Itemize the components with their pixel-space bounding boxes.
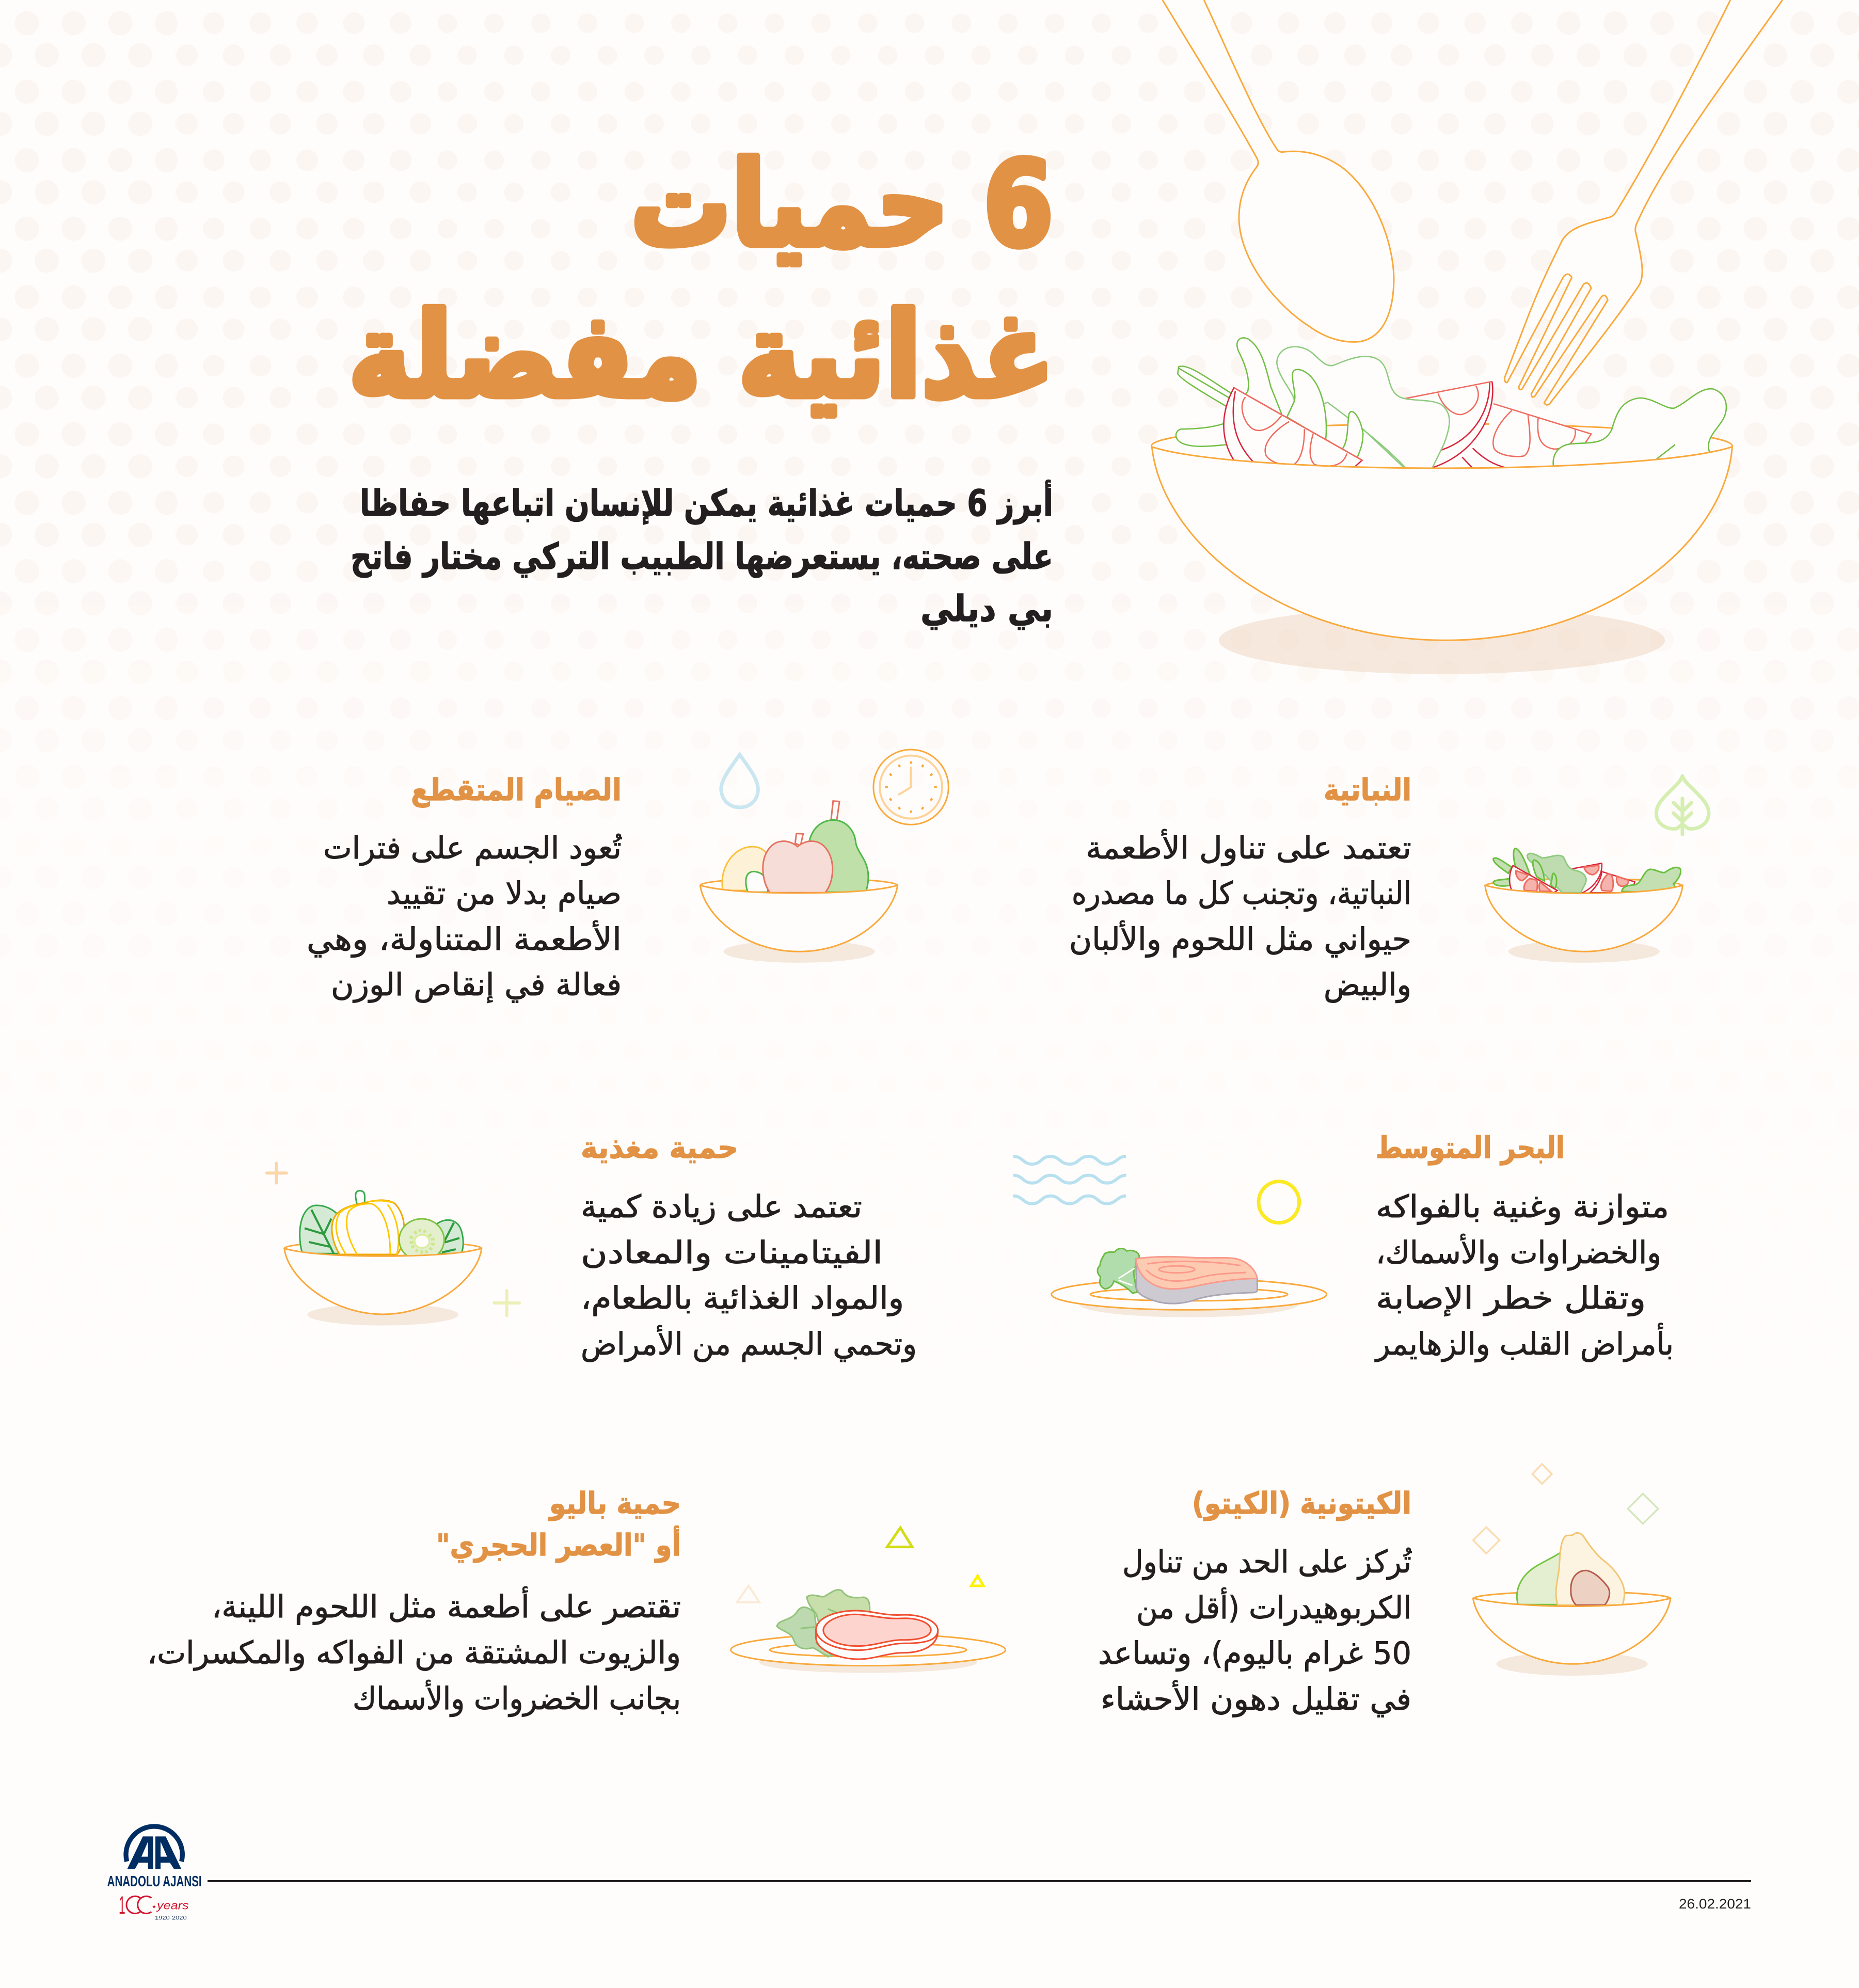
body: mediterranean: وتقلل خطر الإصابة <box>1376 1280 1646 1316</box>
bowl rim back <box>1151 424 1732 468</box>
body: keto: في تقليل دهون الأحشاء <box>1101 1680 1411 1717</box>
body: nutritious: الفيتامينات والمعادن <box>581 1235 883 1271</box>
panel: nutritious diet <box>267 1130 917 1362</box>
heading: mediterranean: البحر المتوسط <box>1376 1130 1565 1166</box>
body: intermittent fasting <box>307 830 622 1003</box>
body: intermittent fasting: الأطعمة المتناولة، وهي <box>307 920 622 958</box>
heading: paleo: أو "العصر الحجري" <box>436 1525 681 1563</box>
icon: plus signs <box>267 1163 287 1183</box>
icon: waves <box>1013 1156 1126 1204</box>
body: intermittent fasting: صيام بدلا من تقييد <box>387 876 622 912</box>
body: nutritious: وتحمي الجسم من الأمراض <box>581 1325 917 1362</box>
body: vegan <box>1069 829 1411 1003</box>
body: paleo: والزيوت المشتقة من الفواكه والمكسرات، <box>147 1635 681 1671</box>
heading: paleo <box>436 1486 681 1563</box>
icon: water drop <box>721 755 758 807</box>
salad leaves <box>1176 338 1726 468</box>
logo 100 years: 1 <box>119 1891 125 1919</box>
icon: leaf <box>1656 776 1709 835</box>
body: intermittent fasting: فعالة في إنقاص الوزن <box>331 967 622 1003</box>
body: keto: 50 غرام باليوم)، وتساعد <box>1098 1635 1411 1672</box>
heading: keto: الكيتونية (الكيتو) <box>1192 1486 1411 1521</box>
icon: diamonds <box>1532 1464 1552 1484</box>
logo 100 years: years <box>156 1899 189 1912</box>
body: nutritious <box>581 1189 917 1362</box>
title <box>348 137 1055 424</box>
body: vegan: تعتمد على تناول الأطعمة <box>1086 829 1411 866</box>
logo wordmark: ANADOLU AJANSI <box>107 1873 202 1890</box>
heading: nutritious: حمية مغذية <box>581 1130 738 1165</box>
icon: avocado bowl <box>1473 1464 1671 1676</box>
spoon <box>1163 0 1394 342</box>
logo 100 years: 1920-2020 <box>155 1915 187 1921</box>
body: paleo <box>147 1586 681 1717</box>
bowl shadow <box>1219 607 1665 674</box>
footer rule <box>208 1880 1751 1882</box>
title: غذائية مفضلة <box>348 288 1055 424</box>
body: vegan: حيواني مثل اللحوم والألبان <box>1069 920 1411 958</box>
intro text: على صحته، يستعرضها الطبيب التركي مختار فاتح <box>351 535 1053 578</box>
logo arc <box>126 1826 182 1862</box>
body: paleo: تقتصر على أطعمة مثل اللحوم اللينة، <box>212 1586 681 1625</box>
body: mediterranean: والخضراوات والأسماك، <box>1376 1234 1661 1271</box>
panel: intermittent fasting <box>307 750 948 1003</box>
intro text: بي ديلي <box>920 587 1053 630</box>
intro text: أبرز 6 حميات غذائية يمكن للإنسان اتباعها حفاظا <box>360 480 1053 525</box>
body: nutritious: تعتمد على زيادة كمية <box>581 1189 862 1225</box>
panel: vegan diet <box>1069 772 1709 1003</box>
intro text <box>351 480 1053 630</box>
logo 100 years <box>119 1891 189 1921</box>
icon: meat plate with triangles <box>731 1528 1006 1673</box>
panel: ketogenic diet <box>1098 1464 1671 1717</box>
fork <box>1504 0 1783 405</box>
body: keto: تُركز على الحد من تناول <box>1122 1544 1412 1580</box>
heading: paleo: حمية باليو <box>548 1486 681 1521</box>
icon: salad bowl with leaf <box>1485 776 1709 963</box>
body: mediterranean: بأمراض القلب والزهايمر <box>1374 1323 1674 1362</box>
logo letters AA <box>128 1836 181 1869</box>
logo 100 years: ★ <box>152 1904 156 1910</box>
icon: sun ring <box>1259 1182 1299 1223</box>
heading: intermittent fasting: الصيام المتقطع <box>411 772 622 808</box>
illustration: spoon fork and salad bowl <box>1151 0 1783 674</box>
logo: Anadolu Ajansi <box>107 1826 202 1921</box>
heading: vegan: النباتية <box>1324 772 1411 807</box>
body: paleo: بجانب الخضروات والأسماك <box>353 1680 681 1717</box>
title: 6 حميات <box>631 137 1053 273</box>
body: intermittent fasting: تُعود الجسم على فترات <box>323 830 622 866</box>
icon: clock <box>873 750 948 824</box>
body: mediterranean <box>1374 1189 1674 1362</box>
body: nutritious: والمواد الغذائية بالطعام، <box>581 1280 904 1316</box>
body: mediterranean: متوازنة وغنية بالفواكه <box>1376 1189 1669 1225</box>
icon: triangles <box>887 1528 912 1547</box>
icon: vegetable bowl <box>267 1163 519 1326</box>
body: vegan: النباتية، وتجنب كل ما مصدره <box>1072 876 1411 912</box>
bowl body <box>1152 447 1732 640</box>
date: 26.02.2021 <box>1679 1896 1751 1912</box>
left tomato wedge <box>1224 388 1362 468</box>
body: keto <box>1098 1544 1412 1717</box>
body: vegan: والبيض <box>1324 967 1411 1003</box>
panel: paleo diet <box>147 1486 1006 1717</box>
panel: mediterranean diet <box>1013 1130 1674 1362</box>
icon: fruit bowl, drop and clock <box>700 750 948 963</box>
body: keto: الكربوهيدرات (أقل من <box>1136 1587 1411 1626</box>
icon: salmon plate with waves and sun <box>1013 1156 1327 1317</box>
right tomato wedges <box>1404 381 1591 468</box>
